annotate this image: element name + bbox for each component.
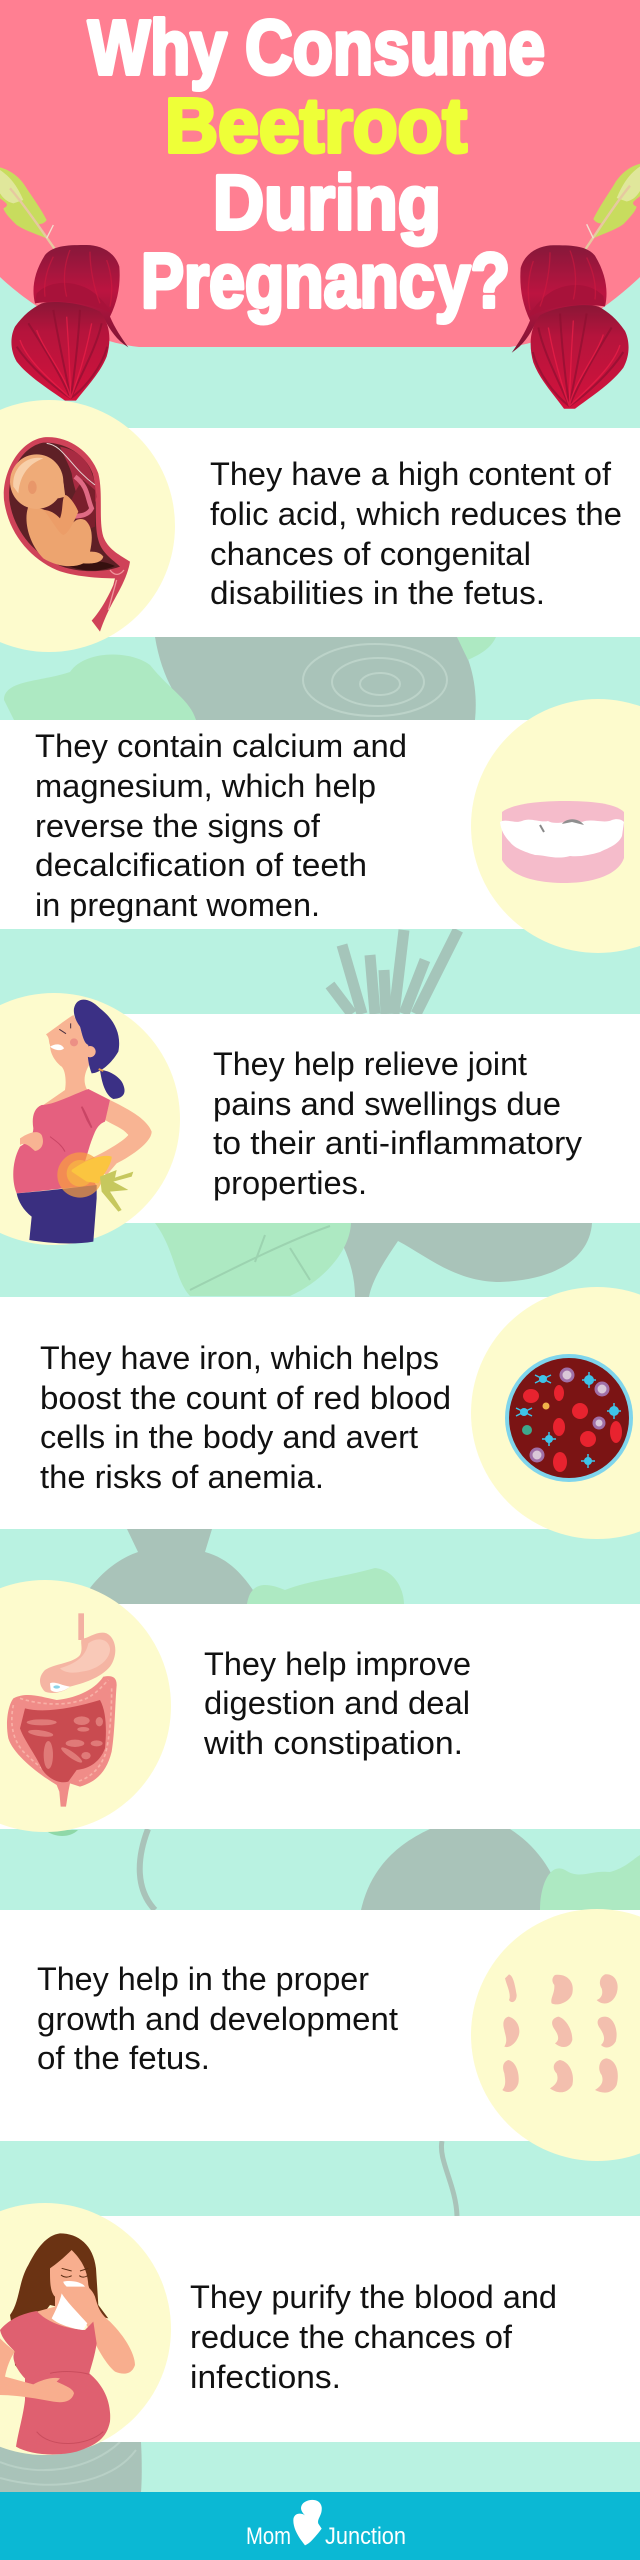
text block bbox=[40, 1340, 451, 1495]
background beet art: gap 1 bbox=[4, 637, 496, 720]
yellow circle bbox=[0, 400, 175, 652]
text block: reduce the chances of bbox=[190, 2319, 512, 2355]
text block: to their anti-inflammatory bbox=[213, 1125, 582, 1161]
yellow circle bbox=[0, 993, 180, 1245]
background beet art: gap 4 bbox=[80, 1529, 404, 1604]
text block: the risks of anemia. bbox=[40, 1459, 324, 1495]
text block: of the fetus. bbox=[37, 2040, 210, 2076]
background beet art: gap 6 bbox=[441, 2141, 457, 2216]
text block: properties. bbox=[213, 1165, 367, 1201]
header panel bbox=[0, 0, 640, 347]
text block: infections. bbox=[190, 2359, 341, 2395]
panel: fetal growth bbox=[0, 1909, 640, 2161]
text block: folic acid, which reduces the bbox=[210, 496, 622, 532]
icon: sick pregnant woman bbox=[0, 2233, 135, 2454]
yellow circle bbox=[0, 1580, 171, 1832]
icon: digestive system bbox=[7, 1613, 117, 1807]
yellow circle bbox=[471, 699, 640, 953]
text block: chances of congenital bbox=[210, 536, 531, 572]
icon: left beetroot bbox=[0, 167, 128, 401]
text block: boost the count of red blood bbox=[40, 1380, 451, 1416]
title: Why Consume bbox=[88, 5, 545, 91]
footer band bbox=[0, 2492, 640, 2560]
panel: joint pains bbox=[0, 993, 640, 1245]
icon: right beetroot bbox=[512, 164, 640, 409]
text block: They have iron, which helps bbox=[40, 1340, 439, 1376]
title: Beetroot bbox=[165, 83, 467, 169]
panel: purify blood bbox=[0, 2203, 640, 2455]
panel: digestion bbox=[0, 1580, 640, 1832]
text block bbox=[213, 1046, 582, 1201]
yellow circle bbox=[0, 2203, 171, 2455]
text block: They help relieve joint bbox=[213, 1046, 527, 1082]
text block: pains and swellings due bbox=[213, 1086, 561, 1122]
text block: disabilities in the fetus. bbox=[210, 575, 545, 611]
text block bbox=[190, 2279, 557, 2395]
text block: reverse the signs of bbox=[35, 808, 320, 844]
text block: decalcification of teeth bbox=[35, 847, 367, 883]
text block: growth and development bbox=[37, 2001, 398, 2037]
text block bbox=[210, 456, 622, 611]
icon: pregnant woman with back pain bbox=[13, 1000, 152, 1243]
icon: teeth bbox=[500, 801, 624, 883]
text block: They help in the proper bbox=[37, 1961, 369, 1997]
logo: MomJunction: Mom bbox=[246, 2523, 291, 2550]
panel: calcium and magnesium bbox=[0, 699, 640, 953]
text block: They have a high content of bbox=[210, 456, 611, 492]
yellow circle bbox=[471, 1909, 640, 2161]
icon: fetus in womb bbox=[4, 437, 130, 632]
title: During bbox=[213, 160, 441, 246]
logo: MomJunction bbox=[246, 2500, 406, 2550]
text block: They help improve bbox=[204, 1646, 471, 1682]
text block bbox=[37, 1961, 398, 2076]
title bbox=[88, 5, 545, 324]
panel: folic acid bbox=[0, 400, 640, 652]
logo: MomJunction: Junction bbox=[325, 2523, 406, 2550]
text block: They contain calcium and bbox=[35, 728, 407, 764]
background beet art: gap 3 bbox=[155, 1223, 592, 1297]
text block: cells in the body and avert bbox=[40, 1419, 418, 1455]
title: Pregnancy? bbox=[141, 238, 510, 324]
text block: with constipation. bbox=[203, 1725, 463, 1761]
background beet art: gap 5 bbox=[45, 1829, 640, 1910]
yellow circle bbox=[471, 1287, 640, 1539]
text block bbox=[203, 1646, 471, 1761]
background beet art: gap 7 bbox=[0, 2442, 142, 2492]
icon: embryo stages bbox=[502, 1974, 618, 2093]
text block: in pregnant women. bbox=[35, 887, 320, 923]
panel: iron bbox=[0, 1287, 640, 1539]
text block: They purify the blood and bbox=[190, 2279, 557, 2315]
text block bbox=[35, 728, 407, 923]
icon: blood cells bbox=[505, 1354, 633, 1482]
text block: magnesium, which help bbox=[35, 768, 376, 804]
text block: digestion and deal bbox=[204, 1685, 470, 1721]
background beet art: gap 2 stems bbox=[330, 930, 458, 1014]
